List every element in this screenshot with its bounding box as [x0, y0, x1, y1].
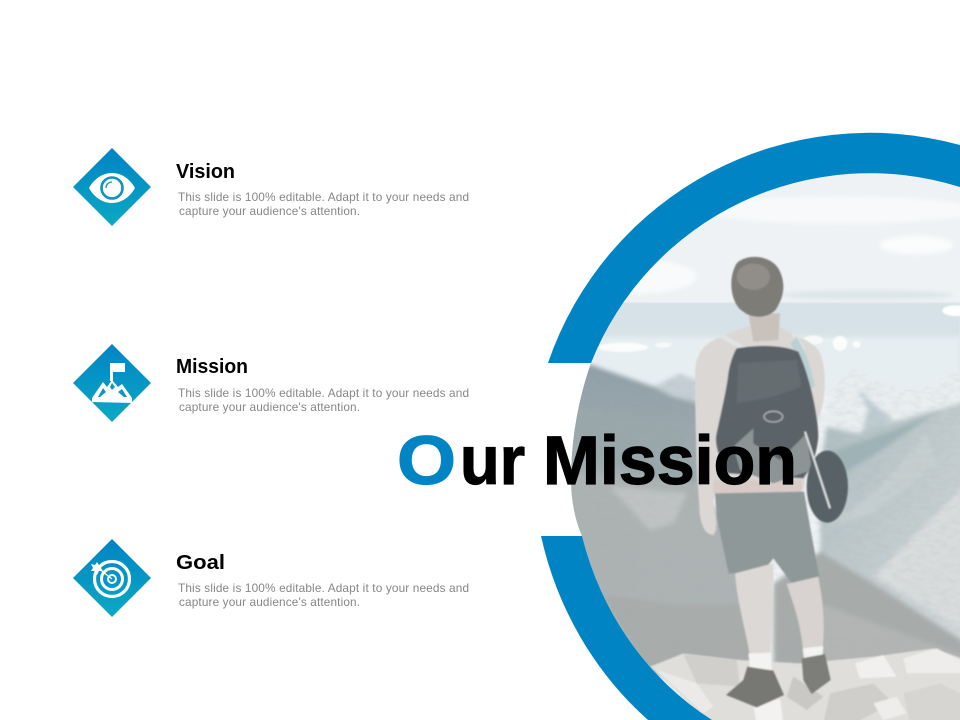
blue ring upper arc — [548, 133, 960, 363]
boots — [726, 667, 784, 707]
shorts — [715, 492, 819, 585]
photo: hiker overlooking mountains — [571, 174, 960, 720]
heading: mission: Mission — [176, 356, 248, 378]
title: Mission — [543, 422, 797, 499]
icon: target in diamond — [73, 539, 151, 617]
mountain landscape — [553, 363, 960, 697]
item: mission — [73, 344, 469, 422]
item: vision — [73, 148, 469, 226]
description: goal: This slide is 100% editable. Adapt it to your needs and — [178, 581, 469, 595]
blue ring lower arc — [541, 536, 712, 720]
item: goal — [73, 539, 469, 617]
texture — [774, 376, 960, 575]
icon: flag on mountain in diamond — [73, 344, 151, 422]
description: goal: capture your audience's attention. — [179, 595, 360, 609]
title: O — [397, 422, 456, 499]
neck — [748, 313, 780, 342]
heading: vision: Vision — [176, 161, 235, 183]
description: mission: capture your audience's attention. — [179, 400, 360, 414]
heading: goal: Goal — [176, 552, 225, 574]
straps — [721, 335, 805, 349]
backpack — [716, 346, 818, 478]
icon: eye in diamond — [73, 148, 151, 226]
title — [397, 422, 797, 499]
arms and torso — [695, 327, 825, 535]
legs — [735, 563, 773, 657]
hiker — [695, 257, 848, 707]
description: mission: This slide is 100% editable. Adapt it to your needs and — [178, 386, 469, 400]
rocks — [650, 648, 960, 720]
hair — [731, 257, 783, 317]
description: vision: This slide is 100% editable. Adapt it to your needs and — [178, 190, 469, 204]
description: vision: capture your audience's attention. — [179, 204, 360, 218]
socks — [748, 653, 772, 670]
hat — [807, 451, 848, 523]
title: ur — [460, 422, 525, 499]
